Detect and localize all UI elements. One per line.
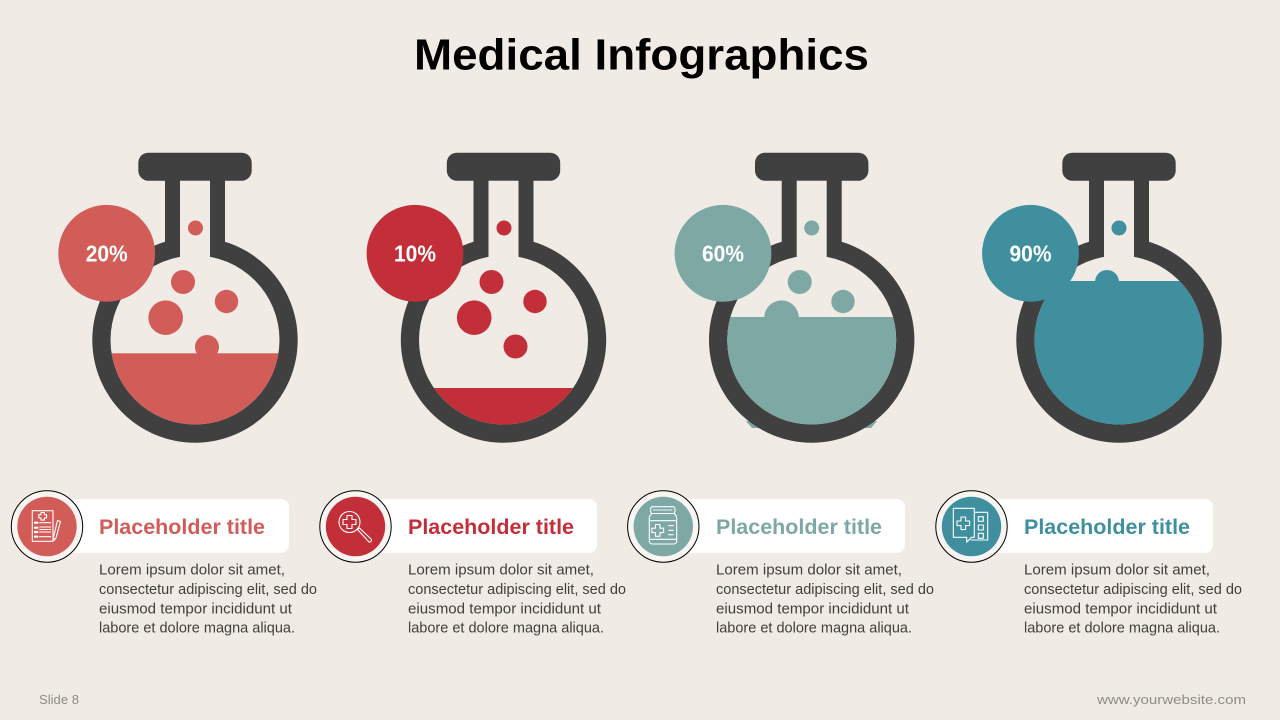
item 4 bbox=[936, 491, 1242, 636]
flask 1: 20% bbox=[58, 153, 298, 443]
flask 3: 60% bbox=[675, 153, 914, 443]
description: Lorem ipsum dolor sit amet, bbox=[99, 562, 285, 578]
item 2 bbox=[320, 491, 626, 636]
title card bbox=[663, 499, 905, 553]
description: consectetur adipiscing elit, sed do bbox=[1024, 581, 1242, 598]
description: labore et dolore magna aliqua. bbox=[1024, 620, 1220, 636]
percentage badge bbox=[675, 205, 771, 302]
flask outline bbox=[92, 153, 298, 443]
liquid sliver behind flask bbox=[746, 421, 877, 428]
flask 2: 10% bbox=[367, 153, 606, 443]
percentage badge: 10% bbox=[394, 240, 436, 266]
item 1 bbox=[11, 491, 317, 636]
description bbox=[408, 562, 626, 636]
footer: website: www.yourwebsite.com bbox=[1096, 692, 1246, 707]
icon: magnifier with cross bbox=[320, 491, 391, 562]
title card: Placeholder title bbox=[716, 516, 882, 539]
description: labore et dolore magna aliqua. bbox=[716, 620, 912, 636]
description: eiusmod tempor incididunt ut bbox=[408, 600, 602, 618]
icon: medicine bottle bbox=[628, 491, 699, 562]
bubbles bbox=[764, 220, 855, 335]
title card bbox=[47, 499, 289, 553]
item 3 bbox=[628, 491, 934, 636]
percentage badge: 20% bbox=[86, 240, 128, 266]
description bbox=[99, 562, 317, 636]
flask 4: 90% bbox=[982, 153, 1222, 443]
description bbox=[716, 562, 934, 636]
footer: slide number: Slide 8 bbox=[39, 692, 79, 707]
bubbles bbox=[1095, 220, 1126, 294]
description: eiusmod tempor incididunt ut bbox=[716, 600, 910, 618]
title card bbox=[971, 499, 1213, 553]
percentage badge bbox=[367, 205, 463, 302]
bubbles bbox=[457, 220, 547, 358]
bubbles bbox=[148, 220, 238, 359]
icon: medical report bbox=[11, 491, 83, 562]
description: eiusmod tempor incididunt ut bbox=[1024, 600, 1218, 618]
description: consectetur adipiscing elit, sed do bbox=[408, 581, 626, 598]
flask outline bbox=[401, 153, 606, 443]
title card bbox=[355, 499, 597, 553]
description: labore et dolore magna aliqua. bbox=[99, 620, 295, 636]
title card: Placeholder title bbox=[408, 516, 574, 539]
percentage badge bbox=[58, 205, 155, 302]
percentage badge: 90% bbox=[1010, 240, 1052, 266]
description: Lorem ipsum dolor sit amet, bbox=[716, 562, 902, 578]
flask outline bbox=[709, 153, 914, 443]
icon: medical documents bbox=[936, 491, 1007, 562]
liquid level bbox=[727, 317, 896, 424]
title card: Placeholder title bbox=[1024, 516, 1190, 539]
description: eiusmod tempor incididunt ut bbox=[99, 600, 293, 618]
flask outline bbox=[1016, 153, 1222, 443]
description: consectetur adipiscing elit, sed do bbox=[716, 581, 934, 598]
description: consectetur adipiscing elit, sed do bbox=[99, 581, 317, 598]
description bbox=[1024, 562, 1242, 636]
liquid level bbox=[1034, 281, 1204, 424]
percentage badge: 60% bbox=[702, 240, 744, 266]
liquid level bbox=[112, 353, 278, 424]
description: Lorem ipsum dolor sit amet, bbox=[408, 562, 594, 578]
percentage badge bbox=[982, 205, 1079, 302]
description: Lorem ipsum dolor sit amet, bbox=[1024, 562, 1210, 578]
liquid level bbox=[434, 388, 573, 424]
title card: Placeholder title bbox=[99, 516, 265, 539]
description: labore et dolore magna aliqua. bbox=[408, 620, 604, 636]
title: Medical Infographics bbox=[414, 30, 869, 80]
